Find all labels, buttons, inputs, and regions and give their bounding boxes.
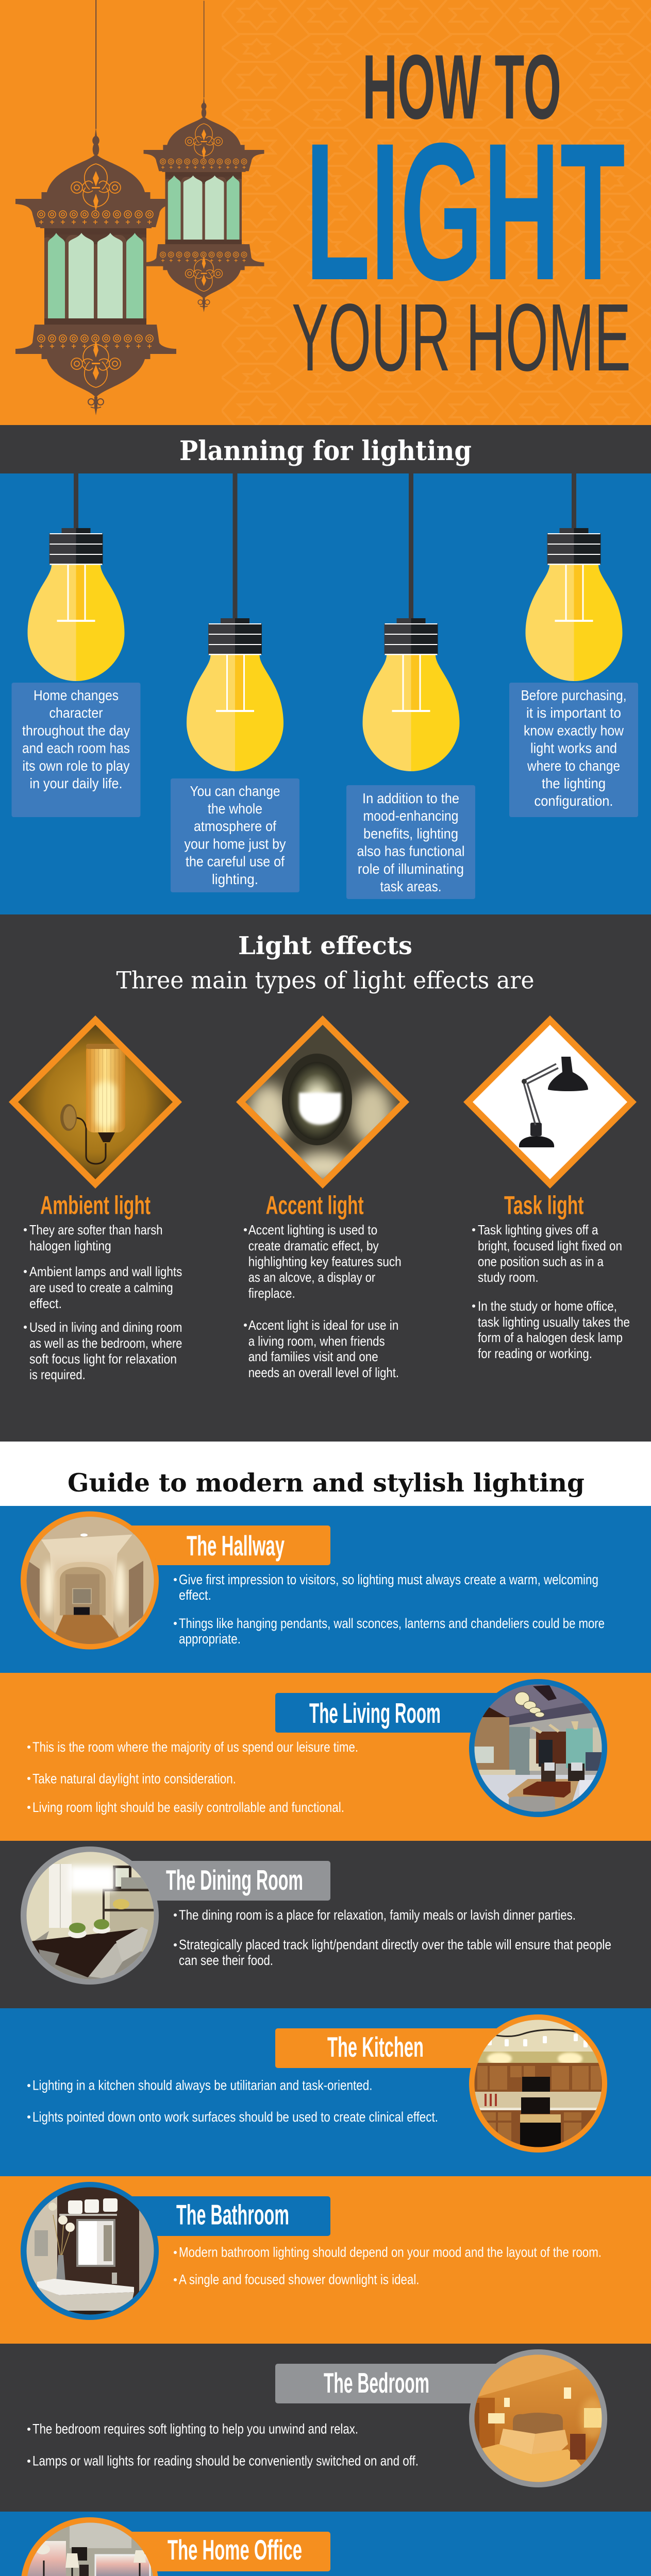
text box 1: in your daily life.	[30, 775, 123, 791]
label: the living room: The Living Room	[309, 1697, 441, 1729]
text: kitchen tips	[27, 2077, 438, 2125]
list: accent light: needs an overall level of light.	[248, 1365, 399, 1380]
text box 2: You can change	[190, 783, 280, 799]
text box 3: role of illuminating	[358, 861, 464, 877]
text box 4	[509, 683, 638, 817]
list: task light: bright, focused light fixed on	[478, 1238, 622, 1253]
list: accent light: highlighting key features such	[248, 1254, 402, 1269]
illustration: small hanging lantern	[143, 1, 264, 312]
text: living room tips: Living room light should be easily controllable and functional.	[32, 1800, 344, 1815]
panel: the dining room	[0, 1841, 651, 2008]
text: dining room tips: can see their food.	[179, 1953, 273, 1968]
label: the dining room: The Dining Room	[166, 1864, 303, 1896]
text box 1: its own role to play	[23, 758, 130, 774]
text: dining room tips: The dining room is a place for relaxation, family meals or lavish dinner parties.	[179, 1907, 576, 1923]
label: the kitchen	[275, 2028, 518, 2068]
text box 4: where to change	[527, 758, 620, 774]
list: accent light: a living room, when friends	[248, 1333, 385, 1349]
text: hallway tips: effect.	[179, 1587, 211, 1603]
list: task light	[472, 1222, 630, 1361]
label: the kitchen: The Kitchen	[327, 2031, 424, 2063]
photo: bathroom	[21, 2182, 159, 2320]
label: the home office: The Home Office	[168, 2534, 302, 2566]
label: the dining room	[103, 1861, 330, 1901]
list: ambient light: is required.	[29, 1367, 86, 1382]
list: ambient light	[24, 1222, 182, 1382]
text box 1: Home changes	[34, 687, 119, 703]
text: bedroom tips: Lamps or wall lights for reading should be conveniently switched on and off.	[32, 2453, 419, 2469]
list: ambient light: Used in living and dining room	[29, 1319, 182, 1335]
heading: planning for lighting: Planning for lighting	[179, 435, 472, 467]
panel: the kitchen	[0, 2008, 651, 2176]
list: task light: In the study or home office,	[478, 1298, 617, 1314]
text: living room tips: This is the room where the majority of us spend our leisure time.	[32, 1739, 358, 1755]
header panel	[0, 0, 651, 425]
photo: home office	[21, 2517, 159, 2576]
list: ambient light: Ambient lamps and wall lights	[29, 1264, 182, 1279]
list: accent light: create dramatic effect, by	[248, 1238, 379, 1253]
subheading: Three main types of light effects are	[116, 967, 534, 994]
illustration: large hanging lantern	[15, 0, 176, 415]
text box 2: lighting.	[212, 871, 258, 887]
panel: the living room	[0, 1673, 651, 1841]
heading: guide to modern and stylish lighting: Guide to modern and stylish lighting	[68, 1468, 585, 1498]
list: task light: one position such as in a	[478, 1254, 604, 1269]
text box 4: it is important to	[526, 705, 621, 721]
icon: accent light diamond	[236, 1015, 409, 1189]
text: bedroom tips: The bedroom requires soft lighting to help you unwind and relax.	[32, 2421, 358, 2437]
text box 4: Before purchasing,	[521, 687, 627, 703]
text: dining room tips	[174, 1907, 611, 1968]
icon: ambient wall lamp diamond	[9, 1015, 182, 1189]
text: bedroom tips	[27, 2421, 419, 2469]
text box 1: throughout the day	[22, 722, 130, 739]
label: the bedroom: The Bedroom	[324, 2367, 429, 2399]
panel: planning for lighting	[0, 425, 651, 914]
text box 2: atmosphere of	[194, 818, 276, 834]
list: ambient light: as well as the bedroom, where	[29, 1335, 182, 1351]
label: the bathroom	[103, 2196, 330, 2236]
icon: bulb 4	[526, 473, 623, 681]
list: ambient light: halogen lighting	[29, 1238, 111, 1253]
list: accent light	[244, 1222, 402, 1380]
panel: the bedroom	[0, 2344, 651, 2512]
list: ambient light: They are softer than harsh	[29, 1222, 163, 1238]
heading: accent light: Accent light	[266, 1191, 364, 1220]
text: bathroom tips	[174, 2244, 602, 2287]
list: accent light: Accent lighting is used to	[248, 1222, 377, 1238]
text box 4: know exactly how	[524, 722, 624, 739]
text box 1: and each room has	[22, 740, 130, 756]
photo: bedroom	[469, 2349, 607, 2487]
icon: bulb 2	[187, 473, 283, 771]
label: the hallway: The Hallway	[187, 1530, 285, 1562]
text box 2	[171, 778, 299, 892]
text box 1: character	[49, 705, 103, 721]
list: task light: study room.	[478, 1269, 539, 1285]
list: ambient light: are used to create a calming	[29, 1280, 173, 1295]
panel: light effects	[0, 914, 651, 1442]
text: kitchen tips: Lights pointed down onto work surfaces should be used to create clinical effect.	[32, 2109, 438, 2125]
list: ambient light: soft focus light for relaxation	[29, 1351, 177, 1366]
text box 2: your home just by	[185, 836, 286, 852]
photo: dining room	[21, 1846, 159, 1985]
label: the home office	[103, 2532, 330, 2571]
list: accent light: fireplace.	[248, 1285, 295, 1301]
list: task light: Task lighting gives off a	[478, 1222, 598, 1238]
text box 3: task areas.	[380, 878, 441, 894]
heading: light effects: Light effects	[238, 931, 412, 960]
text box 3: also has functional	[357, 843, 465, 859]
panel: the hallway	[0, 1506, 651, 1673]
text box 3: mood-enhancing	[363, 808, 459, 824]
heading: ambient light: Ambient light	[40, 1191, 151, 1220]
text box 1	[11, 683, 140, 817]
list: task light: form of a halogen desk lamp	[478, 1330, 623, 1345]
text box 4: the lighting	[542, 775, 606, 791]
heading: task light: Task light	[504, 1191, 584, 1220]
photo: hallway	[21, 1512, 159, 1650]
list: task light: task lighting usually takes the	[478, 1314, 630, 1330]
photo: kitchen	[469, 2014, 607, 2153]
text box 2: the careful use of	[186, 853, 285, 870]
label: the hallway	[103, 1526, 330, 1565]
text: living room tips: Take natural daylight into consideration.	[32, 1771, 236, 1787]
text box 4: configuration.	[534, 793, 613, 809]
text box 3: In addition to the	[362, 790, 459, 806]
label: the bedroom	[275, 2364, 518, 2403]
list: accent light: and families visit and one	[248, 1349, 378, 1364]
text box 3	[346, 785, 475, 899]
icon: task desk lamp diamond	[463, 1015, 637, 1189]
icon: bulb 3	[363, 473, 460, 771]
text: bathroom tips: A single and focused shower downlight is ideal.	[179, 2272, 420, 2287]
label: the living room	[275, 1693, 518, 1733]
photo: living room	[469, 1679, 607, 1817]
text: kitchen tips: Lighting in a kitchen should always be utilitarian and task-oriented.	[32, 2077, 372, 2093]
list: accent light: Accent light is ideal for use in	[248, 1317, 398, 1333]
text: hallway tips: appropriate.	[179, 1631, 241, 1647]
text box 4: light works and	[530, 740, 617, 756]
icon: bulb 1	[28, 473, 125, 681]
panel: the home office	[0, 2512, 651, 2576]
text: hallway tips	[174, 1572, 605, 1647]
list: ambient light: effect.	[29, 1296, 62, 1311]
text: living room tips	[27, 1739, 358, 1815]
label: the bathroom: The Bathroom	[176, 2199, 289, 2231]
panel: the bathroom	[0, 2176, 651, 2344]
text box 3: benefits, lighting	[363, 825, 458, 842]
list: accent light: as an alcove, a display or	[248, 1269, 375, 1285]
text box 2: the whole	[208, 801, 262, 817]
list: task light: for reading or working.	[478, 1346, 592, 1361]
